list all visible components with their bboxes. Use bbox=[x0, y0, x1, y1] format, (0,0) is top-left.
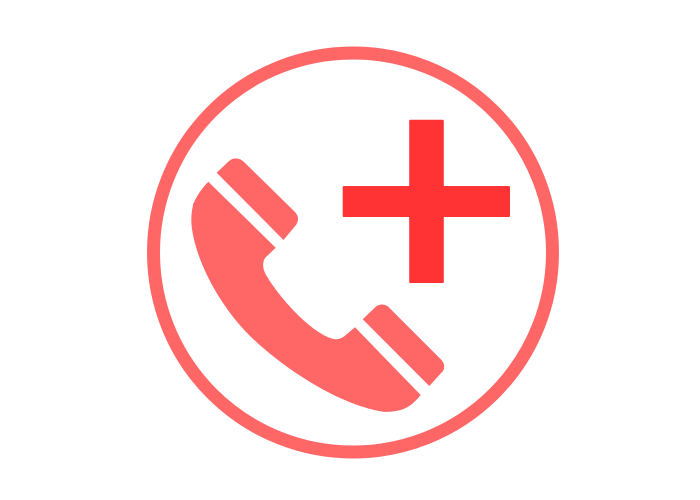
icon: ring bbox=[154, 53, 552, 452]
icon: telephone handset bbox=[191, 158, 444, 412]
icon: red plus bbox=[343, 120, 510, 283]
